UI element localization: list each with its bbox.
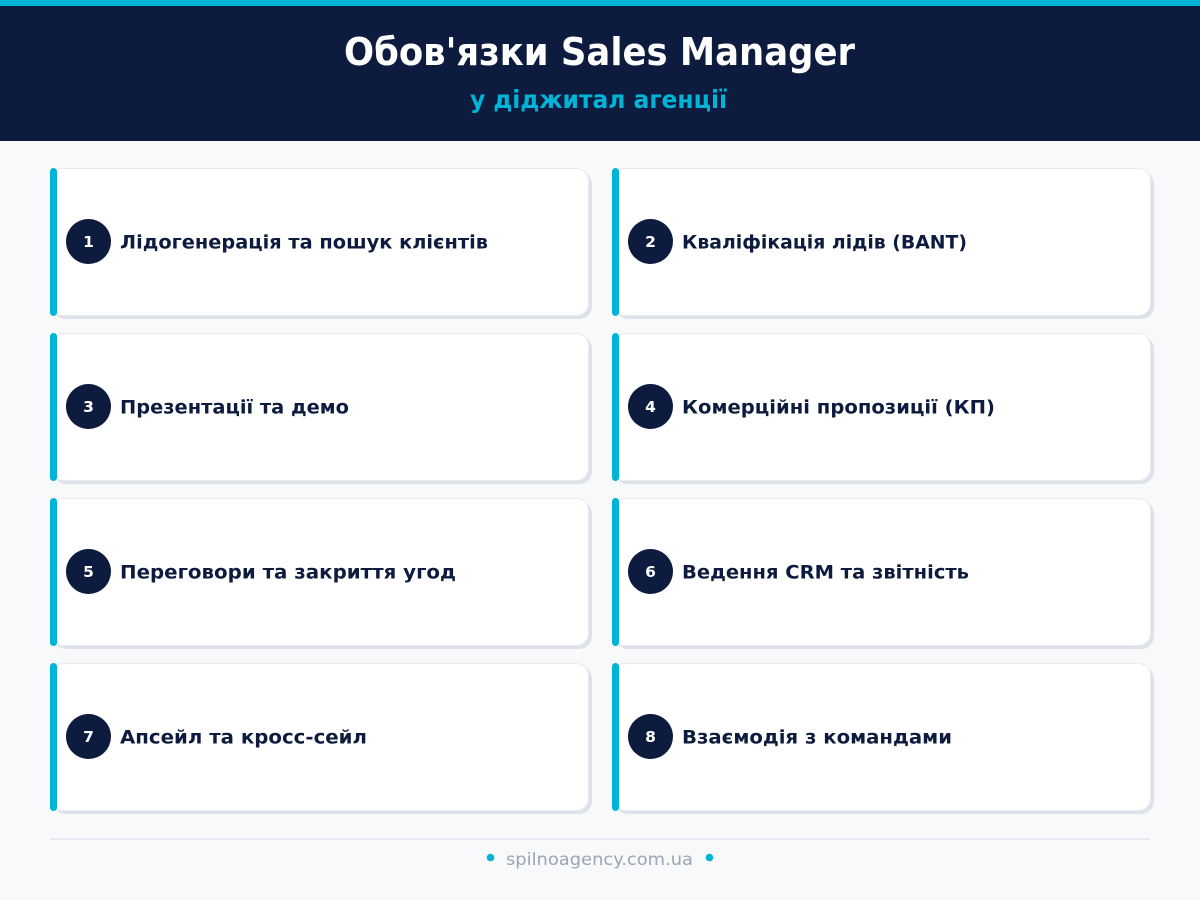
- title: Обов'язки Sales Manager: [344, 30, 855, 74]
- card 6: 6: [645, 563, 656, 581]
- card 6: Ведення CRM та звітність: [682, 562, 969, 584]
- card 3: Презентації та демо: [120, 396, 349, 418]
- header band: [0, 0, 1200, 141]
- card 4: Комерційні пропозиції (КП): [682, 396, 995, 418]
- subtitle: у діджитал агенції: [470, 85, 727, 114]
- card 3: 3: [83, 398, 94, 416]
- card 2: [612, 168, 1154, 319]
- card 6: [612, 498, 1154, 649]
- card 4: [612, 333, 1154, 484]
- card 8: 8: [645, 728, 656, 746]
- card 5: [50, 498, 592, 649]
- card 2: 2: [645, 233, 656, 251]
- card 4: 4: [645, 398, 656, 416]
- card 1: 1: [83, 233, 94, 251]
- card 8: Взаємодія з командами: [682, 726, 952, 748]
- card 8: [612, 663, 1154, 814]
- card 7: [50, 663, 592, 814]
- card 7: 7: [83, 728, 94, 746]
- card 2: Кваліфікація лідів (BANT): [682, 232, 967, 254]
- footer: spilnoagency.com.ua: [506, 850, 693, 869]
- card 7: Апсейл та кросс-сейл: [120, 726, 367, 748]
- card 5: Переговори та закриття угод: [120, 562, 456, 584]
- card 1: Лідогенерація та пошук клієнтів: [120, 232, 488, 254]
- card 5: 5: [83, 563, 94, 581]
- card 1: [50, 168, 592, 319]
- card 3: [50, 333, 592, 484]
